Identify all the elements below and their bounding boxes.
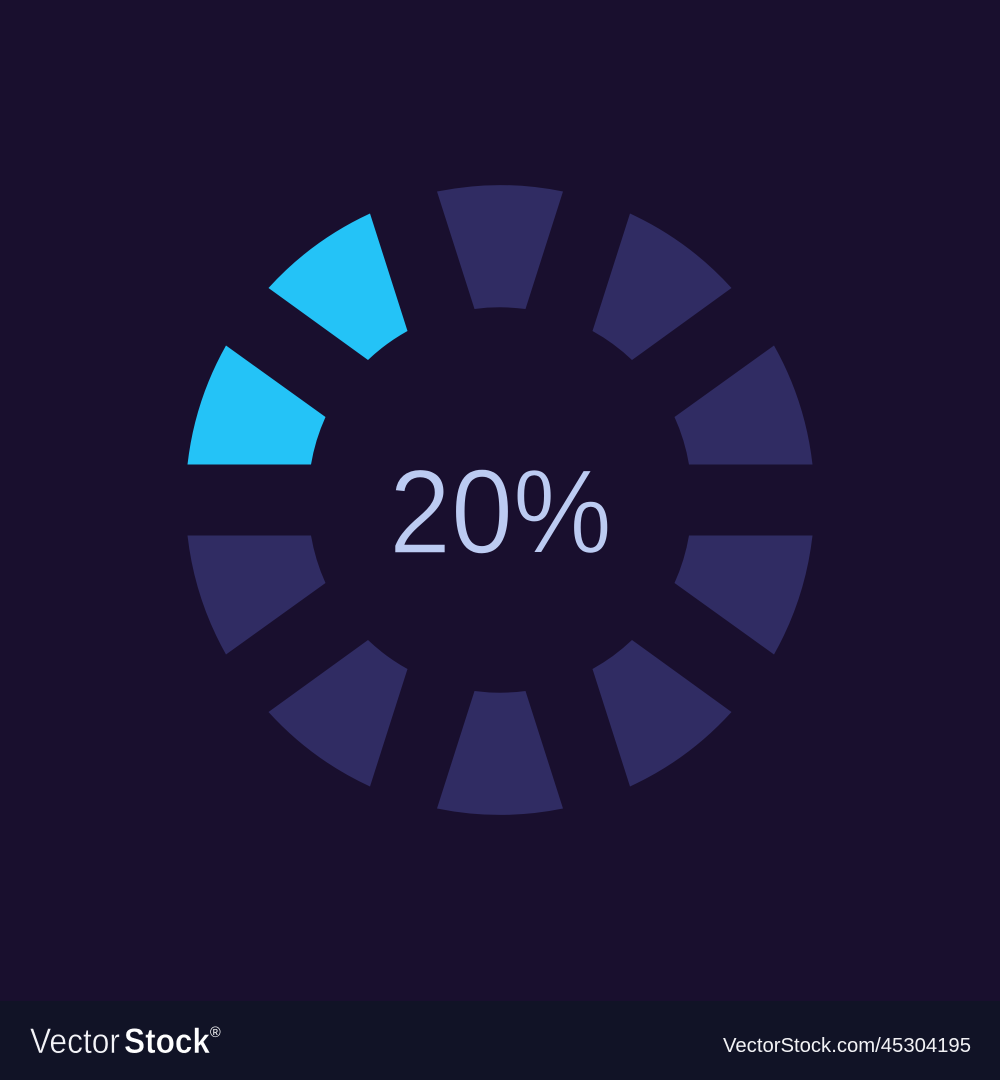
logo word: Vector: Vector [30, 1022, 120, 1061]
segment: right upper (inactive) [674, 346, 812, 464]
segment: bottom (inactive) [437, 691, 563, 815]
segment: left lower (inactive) [188, 536, 326, 654]
footer logo [30, 1022, 221, 1061]
segment: lower left (inactive) [268, 640, 408, 786]
segment: right lower (inactive) [674, 536, 812, 654]
percentage label: 20% [389, 445, 612, 579]
registered mark: ® [210, 1025, 221, 1041]
segment: upper left (active) [268, 214, 408, 360]
radial progress chart [188, 185, 812, 815]
logo word: Stock: Stock [124, 1022, 210, 1061]
footer image id: VectorStock.com/45304195 [723, 1035, 971, 1057]
segment: lower right (inactive) [592, 640, 732, 786]
segment: upper right (inactive) [592, 214, 732, 360]
segment: top (inactive) [437, 185, 563, 309]
segment: left upper (active) [188, 346, 326, 464]
footer bar [0, 1001, 1000, 1080]
